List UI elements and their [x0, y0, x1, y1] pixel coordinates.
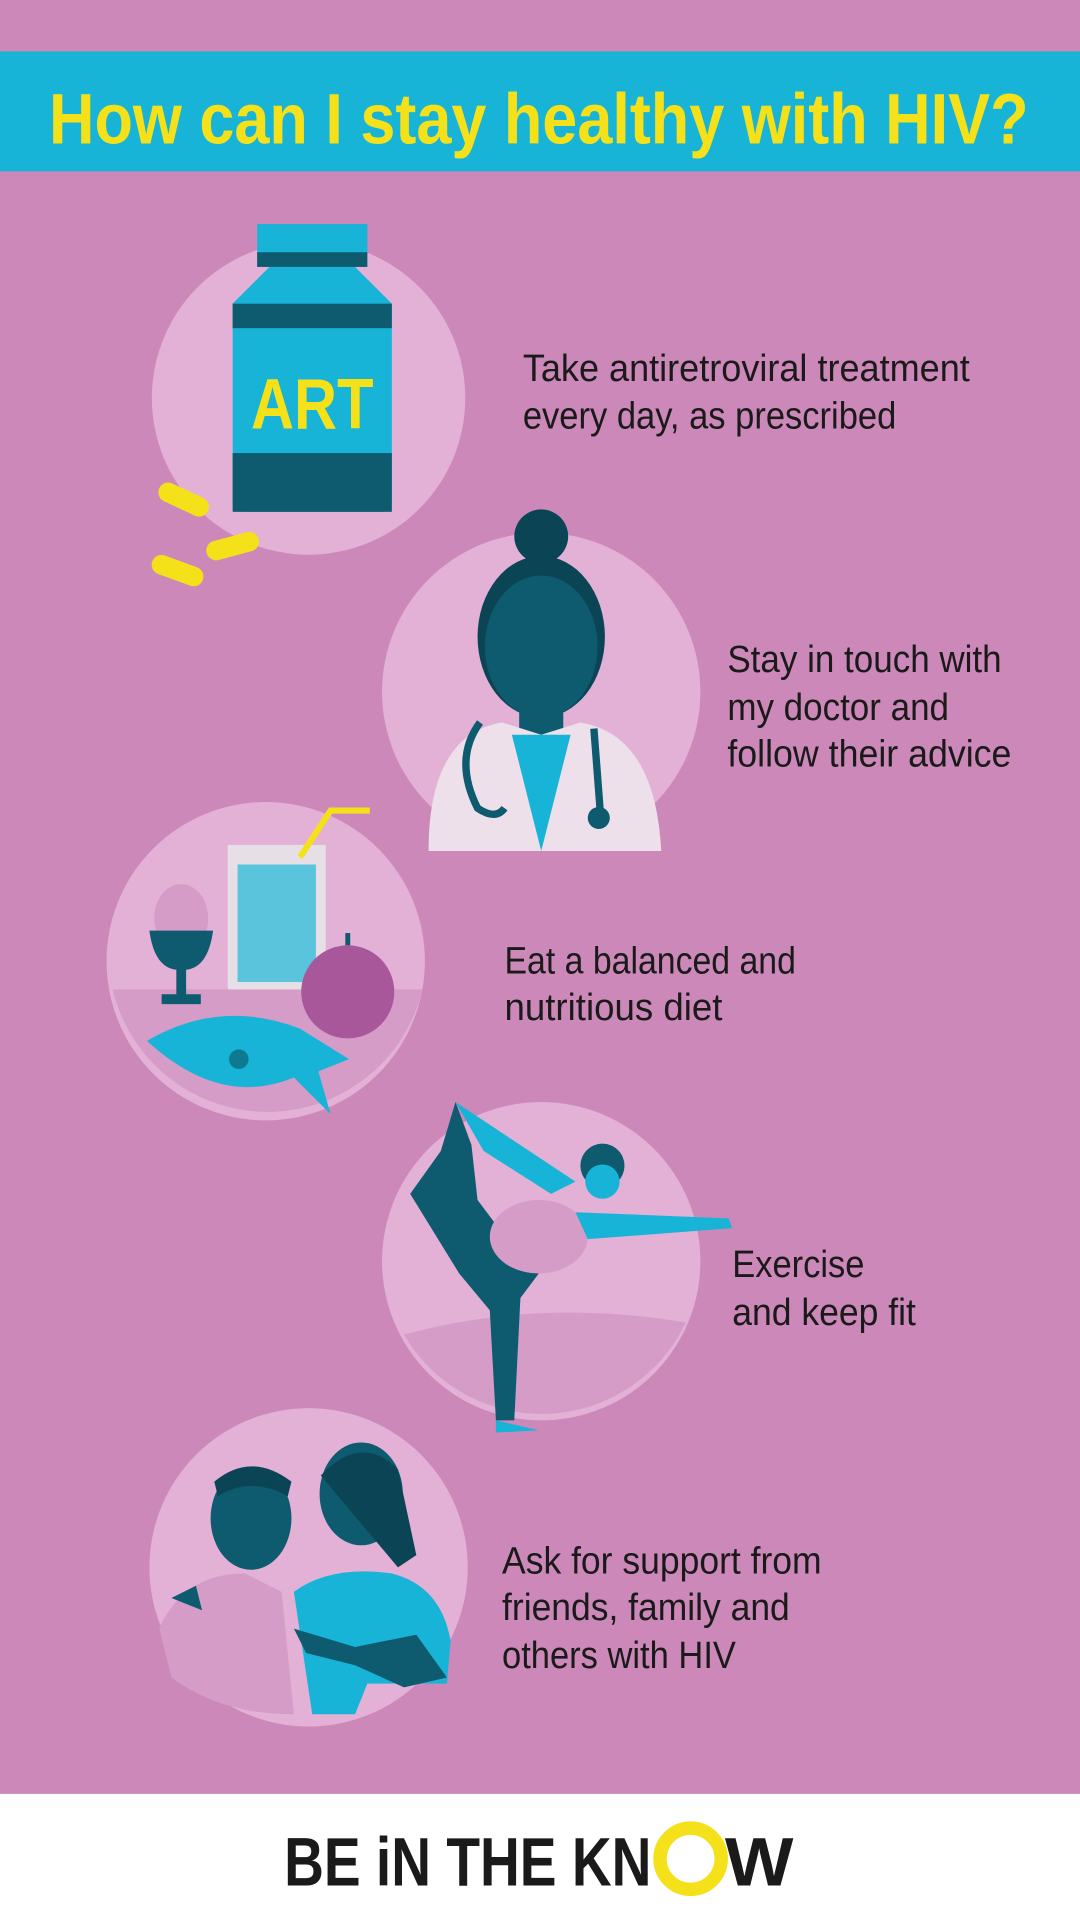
text: diet [504, 940, 796, 1029]
text: doctor: my doctor and [727, 687, 949, 729]
panel: support [149, 1408, 822, 1727]
panel: exercise [382, 1102, 916, 1433]
text: support: friends, family and [502, 1587, 790, 1629]
text: support: Ask for support from [502, 1540, 822, 1582]
text: doctor: follow their advice [727, 734, 1011, 776]
panel: diet [107, 802, 796, 1120]
logo: BE IN THE KNOW: W [725, 1824, 794, 1901]
icon: pill bottle: ART [251, 366, 373, 445]
text: treatment: Take antiretroviral treatment [523, 348, 970, 390]
panel: doctor [382, 509, 1011, 851]
text: doctor [727, 639, 1011, 776]
text: doctor: Stay in touch with [727, 639, 1002, 681]
panel: ART medication [149, 224, 970, 589]
text: diet: Eat a balanced and [504, 940, 796, 982]
title banner [0, 51, 1080, 171]
text: diet: nutritious diet [504, 987, 723, 1029]
text: support [502, 1540, 822, 1677]
text: exercise: and keep fit [732, 1292, 916, 1334]
icon: two people [149, 1408, 468, 1727]
logo: BE IN THE KNOW: BE iN THE KN [284, 1824, 651, 1901]
icon: pill bottle [149, 224, 465, 589]
icon: doctor [382, 509, 700, 851]
text: support: others with HIV [502, 1635, 737, 1677]
footer [0, 1794, 1080, 1920]
text: exercise: Exercise [732, 1244, 864, 1286]
icon: yoga figure [382, 1102, 732, 1433]
icon: food [107, 802, 425, 1120]
text: treatment [523, 348, 970, 438]
text: exercise [732, 1244, 916, 1334]
text: treatment: every day, as prescribed [523, 396, 896, 438]
